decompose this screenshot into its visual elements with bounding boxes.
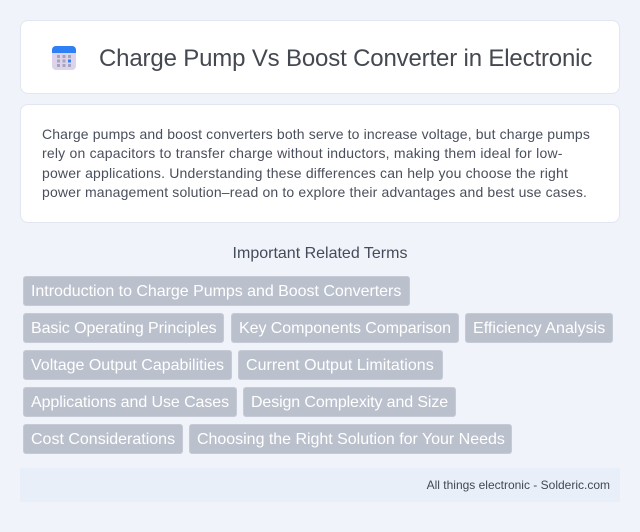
title: Charge Pump Vs Boost Converter in Electronic — [99, 45, 592, 72]
tag: design complexity: Design Complexity and Size — [251, 394, 448, 411]
tag: basic operating principles: Basic Operating Principles — [31, 320, 217, 337]
tag: introduction — [23, 276, 410, 306]
intro text: Charge pumps and boost converters both serve to increase voltage, but charge pumps — [42, 126, 590, 142]
intro text: power applications. Understanding these differences can help you choose the right — [42, 165, 568, 181]
tag: current output: Current Output Limitations — [246, 357, 434, 374]
related terms heading: Important Related Terms — [233, 245, 407, 262]
tag: key components — [231, 313, 459, 343]
term tags — [23, 276, 613, 454]
tag: voltage output — [23, 350, 232, 380]
tag: efficiency — [465, 313, 613, 343]
tag: applications — [23, 387, 237, 417]
footer bar — [20, 468, 620, 502]
tag: current output — [238, 350, 443, 380]
tag: choosing — [189, 424, 512, 454]
tag: choosing: Choosing the Right Solution for Your Needs — [197, 431, 505, 448]
intro text: power management solution–read on to explore their advantages and best use cases. — [42, 184, 587, 200]
footer credit: All things electronic - Solderic.com — [427, 478, 610, 492]
intro text panel — [20, 104, 620, 223]
intro text — [42, 126, 590, 200]
icon: calendar — [52, 46, 76, 70]
intro text: rely on capacitors to transfer charge without inductors, making them ideal for low- — [42, 145, 563, 161]
tag: efficiency: Efficiency Analysis — [473, 320, 605, 337]
tag: design complexity — [243, 387, 456, 417]
tag: key components: Key Components Comparison — [239, 320, 451, 337]
tag: basic operating principles — [23, 313, 224, 343]
tag: applications: Applications and Use Cases — [31, 394, 229, 411]
tag: introduction: Introduction to Charge Pumps and Boost Converters — [31, 283, 401, 300]
header panel — [20, 20, 620, 94]
tag: cost — [23, 424, 183, 454]
tag: voltage output: Voltage Output Capabilities — [31, 357, 224, 374]
tag: cost: Cost Considerations — [31, 431, 175, 448]
